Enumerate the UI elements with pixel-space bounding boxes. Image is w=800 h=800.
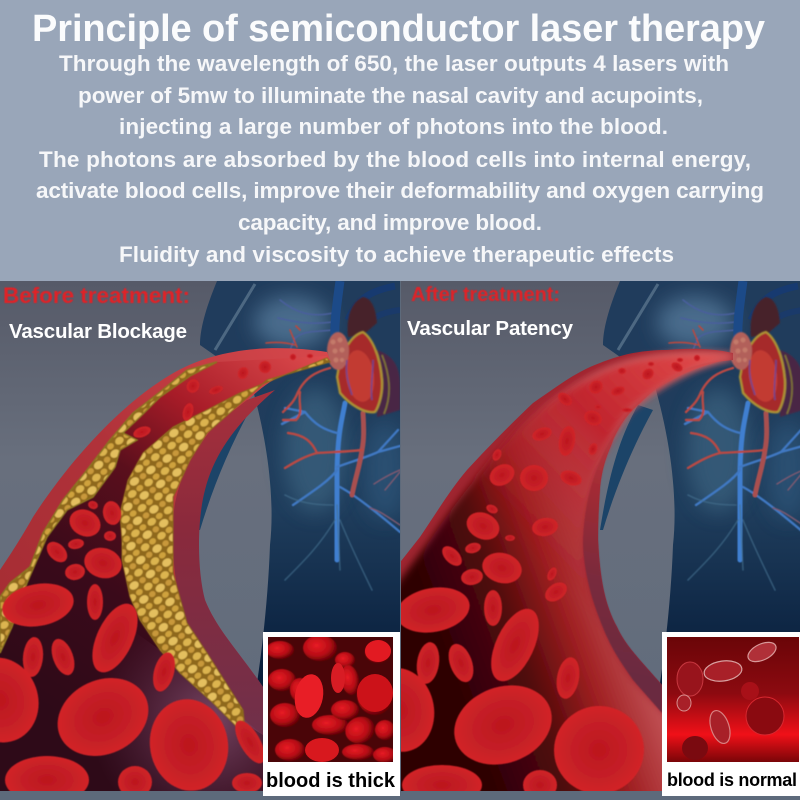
vessel wall lower edge [583, 360, 725, 713]
description text block: Through the wavelength of 650, the laser outputs 4 lasers with [59, 51, 729, 76]
inset photo: clustered cells [266, 635, 397, 763]
lumen upper glow [516, 348, 733, 568]
caption: blood is normal [667, 770, 797, 790]
vessel wall with blockage [0, 348, 330, 735]
inset photo: sparse cells [667, 637, 799, 762]
description text block: Fluidity and viscosity to achieve therapeutic effects [119, 242, 674, 267]
description text block: activate blood cells, improve their deformability and oxygen carrying [36, 178, 764, 203]
inset: thick blood [263, 632, 400, 796]
label: after treatment: After treatment: [411, 284, 560, 306]
caption: blood is thick [266, 770, 396, 792]
panel: before treatment [0, 281, 407, 800]
panel: after treatment [401, 281, 800, 791]
description text block: injecting a large number of photons into the blood. [119, 114, 668, 139]
description text block [36, 51, 764, 267]
red blood cells [0, 354, 313, 800]
title: Principle of semiconductor laser therapy [32, 8, 765, 50]
red blood cells [401, 354, 700, 791]
inset: normal blood [662, 632, 800, 796]
lower plaque [120, 358, 330, 750]
divider band at bottom [0, 791, 263, 800]
description text block: capacity, and improve blood. [238, 210, 542, 235]
label: vascular patency: Vascular Patency [407, 317, 574, 340]
healthy vessel lumen [385, 353, 733, 800]
header panel [0, 0, 800, 281]
upper plaque [0, 362, 217, 653]
label: vascular blockage: Vascular Blockage [9, 320, 187, 343]
description text block: The photons are absorbed by the blood cells into internal energy, [39, 147, 751, 172]
description text block: power of 5mw to illuminate the nasal cavity and acupoints, [78, 83, 703, 108]
healthy vessel wall [401, 348, 733, 720]
vessel lumen [0, 356, 327, 791]
label: before treatment: Before treatment: [3, 283, 190, 308]
